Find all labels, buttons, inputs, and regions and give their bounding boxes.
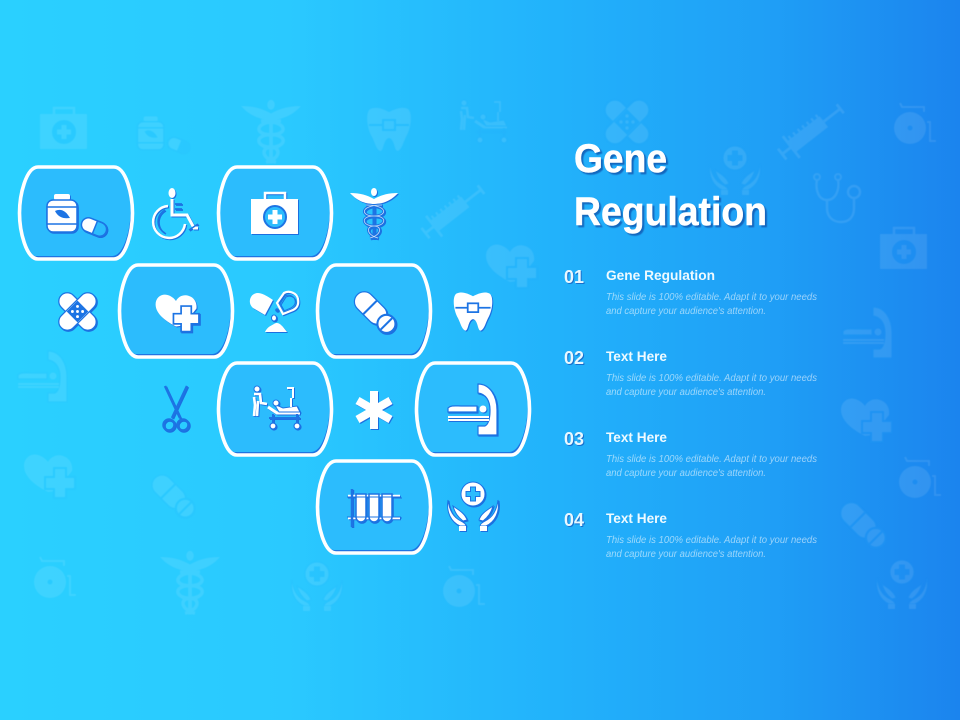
icon: hands holding cross [448, 482, 498, 531]
panel: rounded tiles [18, 164, 529, 553]
list item 03: 03 [564, 429, 584, 449]
list item 03: and capture your audience's attention. [606, 468, 766, 479]
list item 04 [564, 510, 817, 560]
list item 02: and capture your audience's attention. [606, 387, 766, 398]
title [574, 137, 767, 234]
icon: bandage [55, 289, 100, 334]
list item 04: This slide is 100% editable. Adapt it to your needs [606, 535, 817, 546]
title: Gene [574, 137, 667, 181]
list item 01: 01 [564, 267, 584, 287]
title: Regulation [574, 190, 767, 234]
icon: caduceus [350, 188, 398, 239]
icon: medicine bottle and capsule [47, 194, 109, 238]
list item 04: 04 [564, 510, 584, 530]
list item 01 [564, 267, 817, 317]
icon: spilling capsule [250, 292, 298, 332]
list item 01: This slide is 100% editable. Adapt it to your needs [606, 292, 817, 303]
list item 01: Gene Regulation [606, 267, 715, 283]
list item 03: This slide is 100% editable. Adapt it to your needs [606, 454, 817, 465]
list item 04: Text Here [606, 510, 667, 526]
list item 02 [564, 348, 817, 398]
icon: scissors [164, 386, 188, 430]
list item 02: This slide is 100% editable. Adapt it to your needs [606, 373, 817, 384]
icon: wheelchair [153, 188, 198, 238]
watermark icon pattern [18, 96, 941, 615]
icon: heart with plus [156, 295, 198, 331]
icon: test tubes [347, 489, 401, 527]
list item 03 [564, 429, 817, 479]
list item 04: and capture your audience's attention. [606, 549, 766, 560]
icon: tooth with brace [454, 293, 492, 331]
icon: pill and tablet [350, 288, 395, 333]
icon: first aid kit [251, 193, 298, 234]
icon: body scanner [448, 384, 497, 435]
list item 02: Text Here [606, 348, 667, 364]
list item 03: Text Here [606, 429, 667, 445]
list item 02: 02 [564, 348, 584, 368]
icon: patient on hospital bed [254, 386, 300, 429]
icon: medical asterisk [356, 391, 392, 429]
list item 01: and capture your audience's attention. [606, 306, 766, 317]
